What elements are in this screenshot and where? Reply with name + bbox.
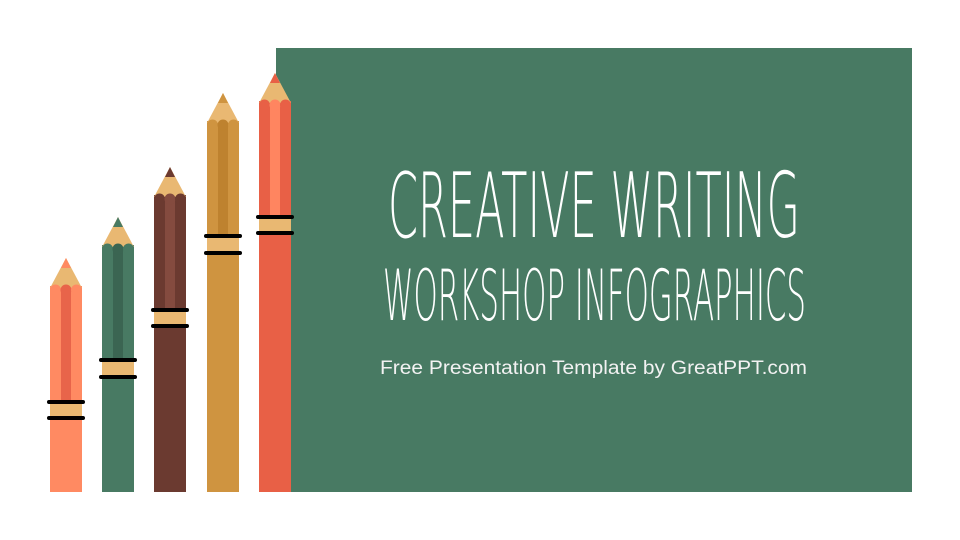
pencil 5: [256, 73, 294, 492]
pencil 1: [47, 258, 85, 492]
subtitle: Free Presentation Template by GreatPPT.com: [380, 358, 807, 379]
pencil 3: [151, 167, 189, 492]
panel: green background: [276, 48, 912, 492]
pencil 4: [204, 93, 242, 492]
pencil 2: [99, 217, 137, 492]
